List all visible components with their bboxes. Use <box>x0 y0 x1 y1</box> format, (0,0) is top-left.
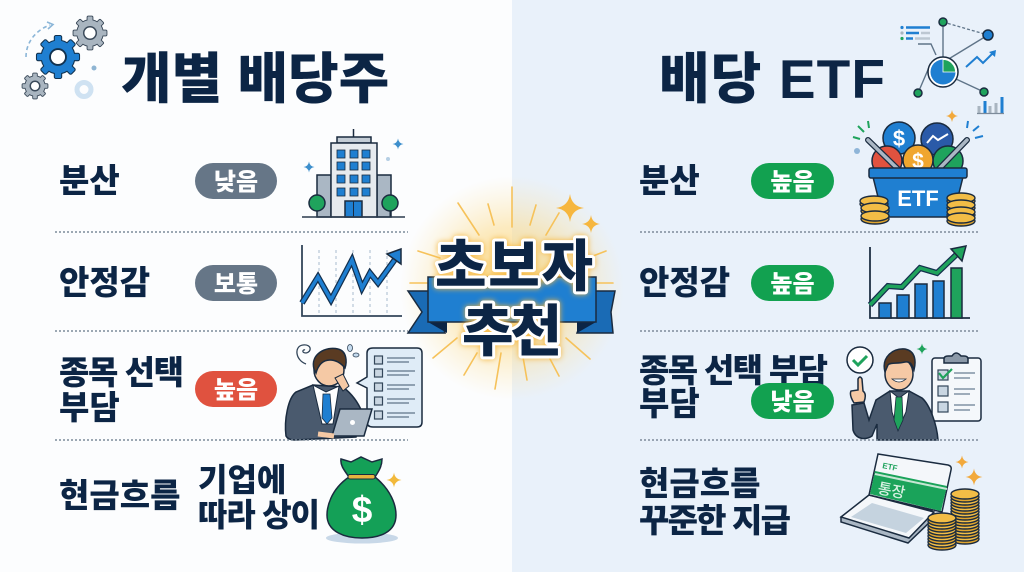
row label: 안정감: 안정감 <box>639 264 730 301</box>
icon: ETF basket: $ <box>893 126 905 151</box>
clipboard <box>932 353 981 421</box>
icon: gears <box>22 16 106 98</box>
ribbon <box>408 277 615 333</box>
suit <box>852 391 938 440</box>
row label: 안정감: 안정감 <box>59 264 150 301</box>
glow <box>400 176 624 400</box>
laptop <box>332 409 372 436</box>
rays <box>410 187 613 389</box>
scribble and sweat <box>297 345 310 364</box>
icon: passbook and coins <box>841 454 982 550</box>
panel: dividend ETF: 부담 <box>639 385 700 422</box>
panel: individual dividend stocks: 부담 <box>59 389 120 426</box>
pill: 보통 <box>195 265 277 301</box>
pill: 높음: 높음 <box>770 271 815 298</box>
pill: 보통: 보통 <box>214 271 258 298</box>
pill: 높음: 높음 <box>770 169 815 196</box>
badge text: 추천 <box>462 300 562 363</box>
pill: 낮음: 낮음 <box>214 169 258 196</box>
icon: ETF basket: $ <box>912 150 924 173</box>
head <box>314 354 344 386</box>
icon: confident businessman with clipboard <box>847 344 981 440</box>
row label: 분산: 분산 <box>639 162 700 199</box>
speech bubble check <box>847 347 873 373</box>
suit <box>285 385 362 440</box>
head <box>885 358 913 390</box>
text: 기업에 따라 상이: 따라 상이 <box>198 497 320 533</box>
background: right panel <box>512 0 1024 572</box>
icon: passbook and coins: ETF <box>882 461 898 473</box>
icon: portfolio network <box>900 18 1004 114</box>
chart: volatile line <box>302 245 402 316</box>
pill: 낮음 <box>751 383 834 419</box>
row label: 종목 선택 부담: 종목 선택 부담 <box>639 352 828 389</box>
pill: 높음 red <box>195 371 277 407</box>
icon: office building <box>302 129 405 217</box>
title: 개별 배당주: 개별 배당주 <box>121 48 389 110</box>
row label: 현금흐름: 현금흐름 <box>639 465 760 502</box>
panel: dividend ETF <box>639 18 1004 550</box>
panel: individual dividend stocks <box>22 16 422 544</box>
checklist bubble <box>357 348 422 427</box>
badge text <box>435 235 593 363</box>
pill: 낮음: 낮음 <box>770 389 815 416</box>
badge text: 초보자 <box>435 235 593 298</box>
pill: 높음 <box>751 163 834 199</box>
title: 배당 ETF: 배당 ETF <box>659 48 885 110</box>
chart: rising bars and line <box>870 246 970 318</box>
row label: 현금흐름: 현금흐름 <box>59 477 180 514</box>
icon: ETF basket: ETF <box>897 186 939 211</box>
center badge: 초보자 추천 <box>400 176 624 400</box>
row label: 종목 선택 부담: 종목 선택 <box>59 354 184 391</box>
pill: 높음 <box>751 265 834 301</box>
text: 꾸준한 지급: 꾸준한 지급 <box>639 502 791 539</box>
text: 기업에 따라 상이: 기업에 <box>198 462 286 498</box>
text: 기업에 따라 상이 <box>198 462 320 533</box>
sparkles <box>556 194 584 222</box>
pill: 낮음 <box>195 163 277 199</box>
icon: money bag <box>326 457 402 544</box>
icon: ETF basket <box>853 110 983 226</box>
icon: worried businessman with checklist <box>285 344 422 440</box>
raised hand <box>850 377 865 403</box>
icon: passbook and coins: 통장 <box>876 480 907 502</box>
pill: 높음 red: 높음 <box>214 377 258 404</box>
background: left panel <box>0 0 512 572</box>
row label: 분산: 분산 <box>59 162 120 199</box>
icon: money bag: $ <box>352 489 373 530</box>
